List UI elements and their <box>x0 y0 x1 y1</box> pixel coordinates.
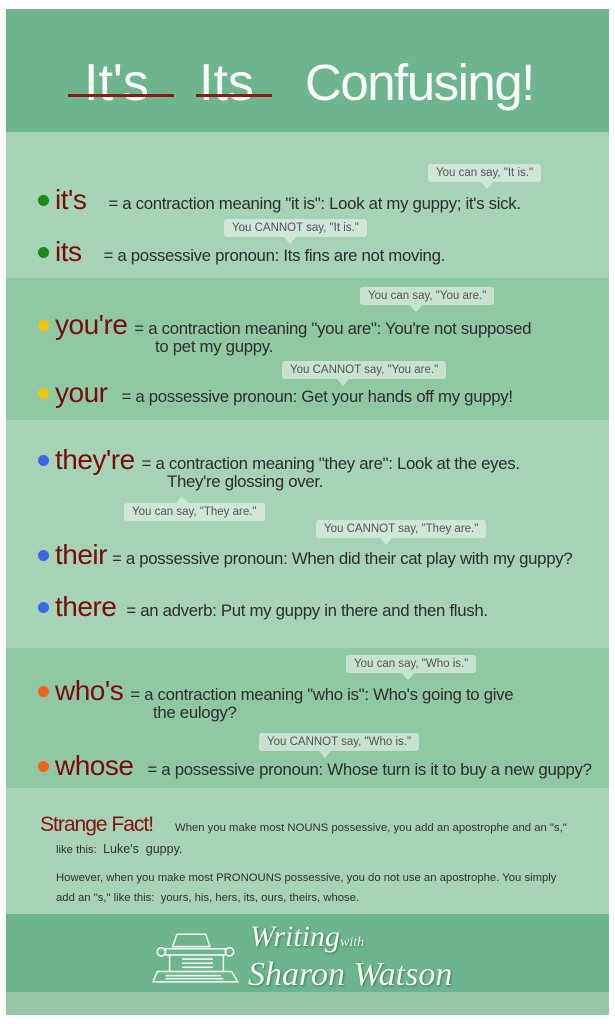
bubble: their <box>316 520 486 538</box>
row: its: = a possessive pronoun: Its fins are not moving. <box>104 246 445 265</box>
panel: it's / its <box>6 132 609 278</box>
text: they're line 2: They're glossing over. <box>167 472 323 491</box>
logo text <box>248 920 453 993</box>
logo text: Writingwith <box>250 920 364 953</box>
row: there: there <box>55 591 116 622</box>
bubble: your <box>282 361 446 379</box>
footer logo <box>152 920 453 993</box>
bubble: they're <box>124 503 265 521</box>
row: they're: they're <box>55 444 135 475</box>
row: your <box>38 377 513 408</box>
strange fact text block: However, when you make most PRONOUNS possessive, you do not use an apostrophe. You simply <box>56 872 556 884</box>
row: you're: you're <box>55 309 127 340</box>
bubble: it's: You can say, "It is." <box>436 167 533 179</box>
bubble: its: You CANNOT say, "It is." <box>232 222 359 234</box>
row: your: your <box>55 377 107 408</box>
bubble: you're <box>360 287 494 305</box>
title: It's <box>84 54 149 112</box>
row: there <box>38 591 488 622</box>
text: you're line 2: to pet my guppy. <box>155 337 273 356</box>
row: who's: = a contraction meaning "who is": Who's going to give <box>130 685 513 704</box>
row: your: = a possessive pronoun: Get your hands off my guppy! <box>121 387 513 406</box>
row: they're: = a contraction meaning "they are": Look at the eyes. <box>142 454 520 473</box>
row: whose <box>38 750 592 781</box>
text: who's line 2: the eulogy? <box>153 703 236 722</box>
panel: you're / your <box>6 278 609 420</box>
bubble: your: You CANNOT say, "You are." <box>290 364 438 376</box>
row: it's: it's <box>55 184 86 215</box>
panel: they're / their / there <box>6 420 609 648</box>
row: it's <box>38 184 521 215</box>
row: their: their <box>55 539 107 570</box>
strange fact text block: add an "s," like this: yours, his, hers, its, ours, theirs, whose. <box>56 892 359 904</box>
strange fact text block <box>40 813 567 904</box>
bubble: they're: You can say, "They are." <box>132 506 257 518</box>
title: Confusing! <box>305 54 534 111</box>
row: who's <box>38 675 513 706</box>
row: whose: whose <box>55 750 133 781</box>
bubble: its <box>224 219 367 237</box>
title <box>68 54 534 112</box>
title: Its <box>199 54 254 112</box>
bubble: who's <box>346 655 476 673</box>
strange fact text block: like this: Luke's guppy. <box>56 842 182 856</box>
bubble: you're: You can say, "You are." <box>368 290 486 302</box>
icon: typewriter <box>152 934 239 983</box>
row: there: = an adverb: Put my guppy in there and then flush. <box>126 601 488 620</box>
bubble: their: You CANNOT say, "They are." <box>324 523 478 535</box>
panel: who's / whose <box>6 648 609 788</box>
row: their: = a possessive pronoun: When did their cat play with my guppy? <box>112 549 572 568</box>
row: they're <box>38 444 520 475</box>
bubble: who's: You can say, "Who is." <box>354 658 468 670</box>
row: you're: = a contraction meaning "you are": You're not supposed <box>134 319 531 338</box>
header band <box>6 9 609 132</box>
bubble: it's <box>428 164 541 182</box>
bubble: whose: You CANNOT say, "Who is." <box>267 736 411 748</box>
row: their <box>38 539 572 570</box>
row: its <box>38 236 445 267</box>
row: whose: = a possessive pronoun: Whose turn is it to buy a new guppy? <box>147 760 592 779</box>
heading: strange fact: Strange Fact! When you make most NOUNS possessive, you add an apostrophe and an "s," <box>40 813 567 836</box>
row: who's: who's <box>55 675 123 706</box>
footer band <box>6 914 609 992</box>
panel: strange fact <box>6 788 609 914</box>
logo text: Sharon Watson <box>248 956 452 993</box>
row: it's: = a contraction meaning "it is": Look at my guppy; it's sick. <box>108 194 521 213</box>
row: its: its <box>55 236 82 267</box>
row: you're <box>38 309 531 340</box>
bubble: whose <box>259 733 419 751</box>
